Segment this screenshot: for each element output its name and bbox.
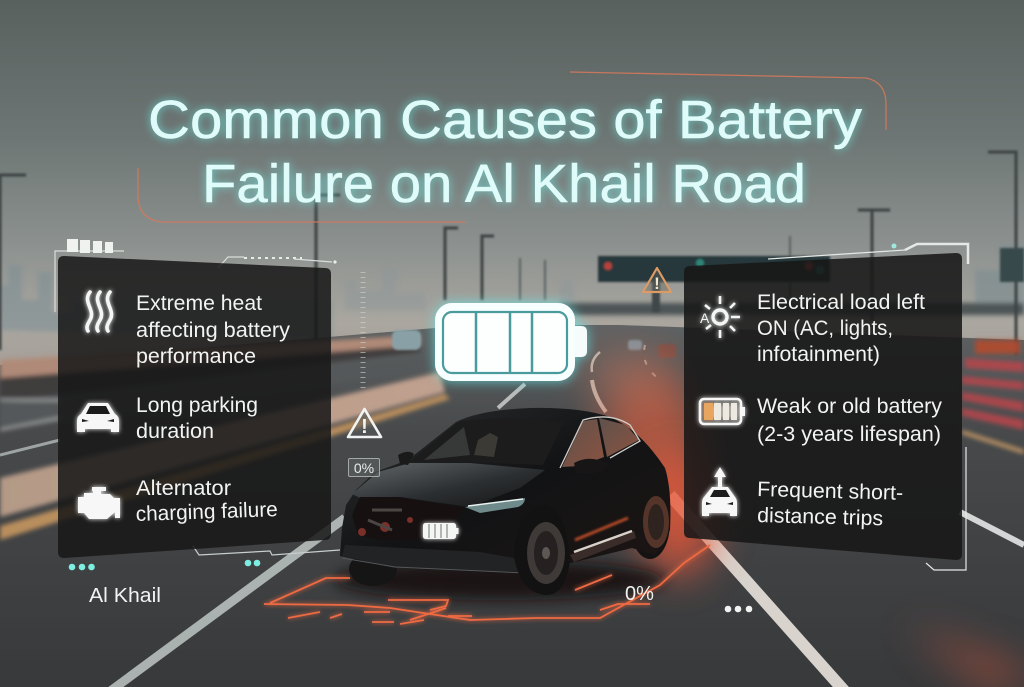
orange glow — [602, 370, 702, 510]
dots: white right — [725, 606, 752, 612]
title: Common Causes of Battery — [148, 90, 862, 150]
text: electrical load: Electrical load left — [757, 291, 925, 314]
glowing battery in engine bay — [423, 523, 458, 539]
label: 0% badge — [348, 458, 380, 476]
icon: weak battery — [700, 399, 745, 424]
glowing circuit lines on the road — [264, 545, 710, 624]
title frame lines — [138, 72, 886, 222]
rear wheel — [643, 496, 669, 548]
text: extreme heat: Extreme heat — [136, 292, 262, 315]
title: Failure on Al Khail Road — [202, 154, 806, 214]
text: alternator: Alternator — [136, 477, 231, 500]
wheels behind the body — [349, 552, 397, 586]
icon: battery hero — [439, 307, 587, 377]
distant cars — [392, 330, 421, 350]
text: weak battery: Weak or old battery — [757, 395, 943, 418]
mirrors — [398, 452, 414, 465]
text: alternator — [135, 477, 278, 526]
text: short trips: distance trips — [757, 504, 883, 530]
icon: warning triangle white — [348, 409, 381, 438]
text: long parking: Long parking — [136, 394, 258, 417]
panel: left causes — [58, 256, 331, 558]
text: electrical load: infotainment) — [757, 343, 880, 366]
car shadow — [335, 560, 665, 600]
engine bay — [352, 497, 465, 540]
icon: warning triangle orange — [643, 268, 671, 293]
lower bumper — [342, 545, 525, 572]
windshield — [410, 418, 563, 465]
text: short trips — [757, 478, 903, 530]
icon: engine — [78, 487, 120, 519]
text: extreme heat — [136, 292, 291, 368]
text: electrical load: ON (AC, lights, — [757, 317, 893, 340]
right side light trails — [962, 340, 1024, 454]
text: short trips: Frequent short- — [757, 478, 903, 505]
label: 0% road: 0% — [625, 583, 654, 605]
icon: car with up arrow — [702, 467, 737, 516]
text: extreme heat: affecting battery — [136, 319, 291, 342]
label: 0% badge: 0% — [354, 460, 374, 476]
hood — [352, 463, 545, 507]
lane markings — [0, 345, 1024, 687]
dots: teal centre — [245, 560, 260, 566]
panel: right causes — [684, 253, 962, 560]
gantry — [598, 256, 830, 282]
icon: electrical load sun: A — [700, 310, 710, 326]
text: alternator: charging failure — [135, 498, 278, 526]
side skirt — [570, 531, 636, 562]
dots: teal left — [69, 564, 95, 570]
road surface — [0, 325, 1024, 687]
headlight — [465, 498, 525, 513]
icon: heat waves — [87, 292, 112, 331]
text: long parking — [136, 394, 258, 443]
car body — [340, 408, 670, 574]
icon: electrical load sun — [700, 296, 740, 338]
icon: warning triangle orange: ! — [654, 274, 660, 293]
icon: warning triangle white: ! — [361, 416, 368, 438]
text: weak battery — [757, 395, 943, 446]
text: electrical load — [757, 291, 925, 366]
title — [148, 90, 862, 214]
label: Al Khail: Al Khail — [89, 585, 161, 607]
text: long parking: duration — [136, 420, 214, 443]
car with exposed engine — [335, 408, 670, 600]
street lamps — [0, 152, 1016, 355]
text: weak battery: (2-3 years lifespan) — [757, 423, 941, 446]
text: extreme heat: performance — [136, 345, 256, 368]
icon: parked car — [77, 403, 119, 432]
side windows — [562, 419, 604, 467]
front wheel — [514, 505, 570, 595]
right HUD decorations — [768, 244, 968, 570]
left HUD decorations — [55, 239, 363, 555]
